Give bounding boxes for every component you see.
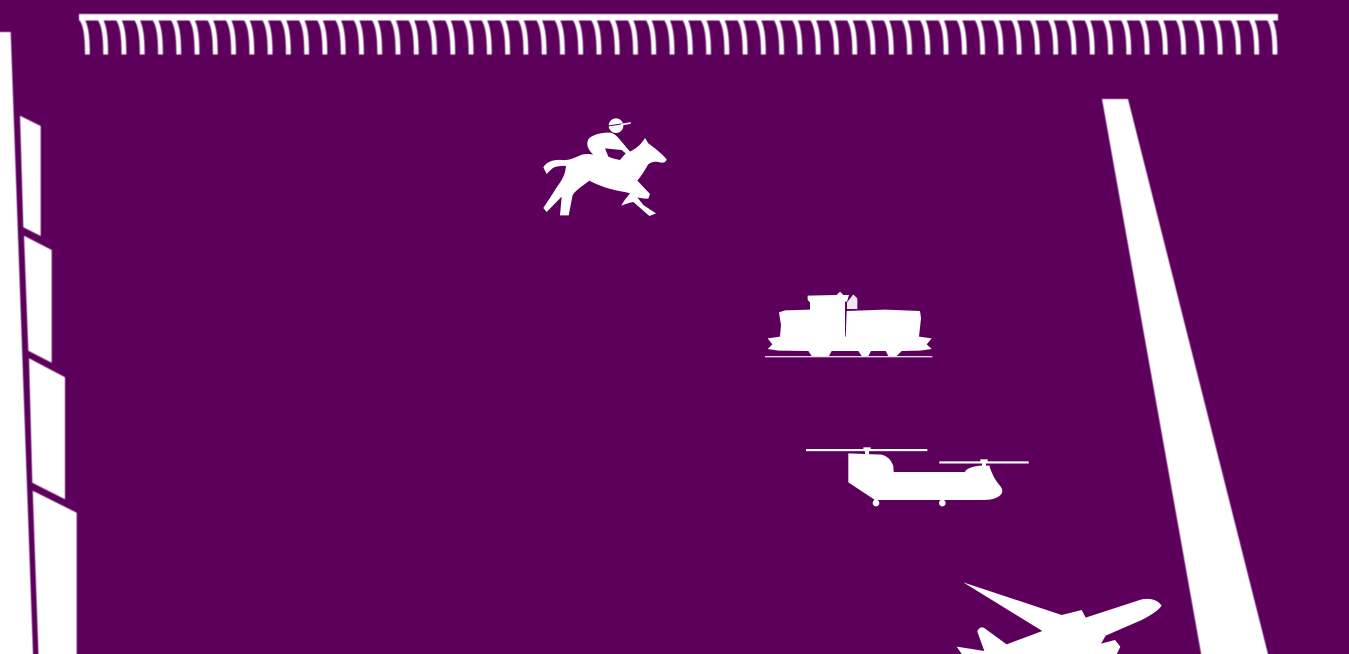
left tower structure [0, 32, 77, 654]
icon: horse and jockey [543, 118, 667, 216]
comb rail at top [79, 14, 1278, 55]
right diagonal beam [1102, 99, 1272, 654]
icon: locomotive [765, 292, 932, 357]
icon: twin-rotor helicopter [806, 447, 1029, 506]
icon: airplane [957, 582, 1162, 654]
